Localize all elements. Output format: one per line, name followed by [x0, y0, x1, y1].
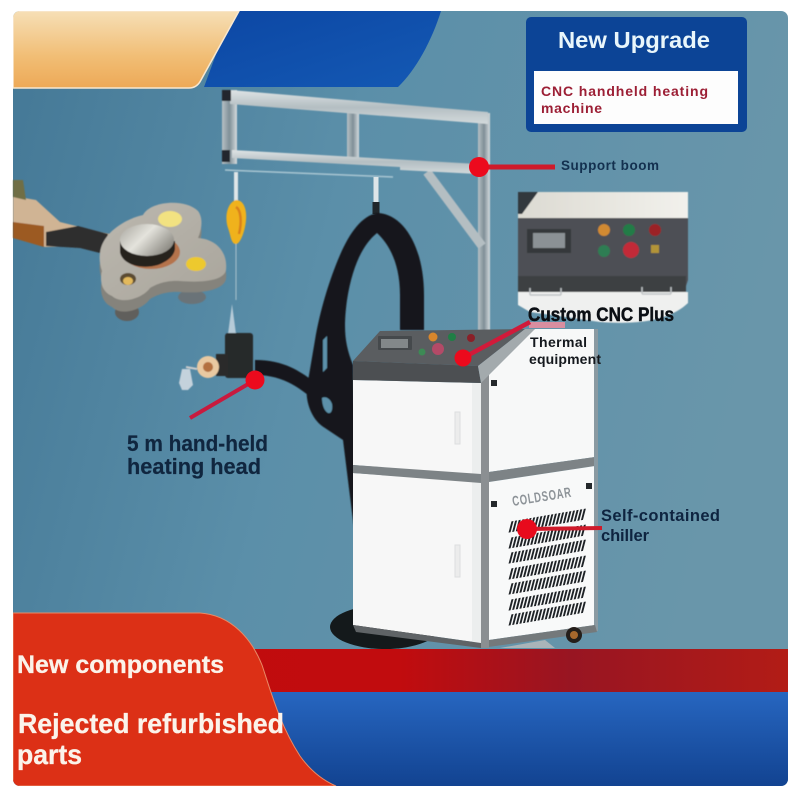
label: custom CNC plus: Custom CNC Plus	[528, 305, 674, 326]
boom thin rail	[225, 170, 393, 177]
console front	[353, 361, 481, 383]
leader: support boom	[469, 157, 555, 177]
inset handles	[530, 287, 671, 295]
panel: red corner shape	[13, 613, 336, 786]
label: thermal equipment: Thermal	[530, 334, 587, 350]
boom left upright	[222, 90, 237, 164]
icon: hanging balancer	[226, 172, 246, 300]
icon: heated three-lobed workpiece	[13, 180, 226, 321]
icon: hose hook	[374, 177, 378, 214]
banner: top blue shape	[204, 11, 441, 87]
chiller grille	[510, 514, 586, 620]
door handles	[455, 412, 460, 577]
callout subtitle: CNC handheld heating	[541, 83, 708, 99]
workpiece central cylinder	[122, 235, 180, 269]
floor reflection	[500, 640, 555, 648]
control console	[353, 329, 525, 366]
cabinet middle band right	[489, 457, 595, 482]
callout title: New Upgrade	[558, 27, 710, 53]
callout white panel	[534, 71, 738, 124]
inset top cover	[518, 192, 688, 222]
cabinet side strips	[472, 383, 481, 643]
leader: thermal equipment	[454, 322, 565, 366]
label: rejected refurbished parts: parts	[17, 739, 82, 770]
workpiece arm	[13, 196, 110, 252]
boom mid strut	[347, 108, 359, 158]
hose loop	[255, 213, 424, 545]
inset lower white edge	[518, 292, 688, 323]
console screen	[378, 336, 412, 350]
boom right upright	[478, 113, 490, 331]
banner: top orange shape	[13, 11, 239, 88]
console bevel	[478, 329, 535, 383]
inset dark panel	[518, 218, 688, 292]
cabinet middle band left	[353, 465, 481, 483]
label: support boom: Support boom	[561, 158, 659, 173]
caster wheel	[566, 627, 582, 643]
callout subtitle: machine	[541, 100, 602, 116]
base disc	[330, 605, 440, 649]
cabinet right edge	[594, 329, 598, 631]
inset screen	[527, 229, 571, 253]
cabinet base right	[481, 625, 597, 648]
label: 5 m hand-held heating head: 5 m hand-held	[127, 431, 268, 456]
cabinet right face upper	[489, 329, 595, 472]
label: 5 m hand-held heating head: heating head	[127, 454, 261, 479]
workpiece feet	[115, 303, 139, 321]
callout: new upgrade box	[526, 17, 747, 132]
inset buttons	[598, 224, 661, 258]
boom diagonal brace	[427, 172, 482, 246]
chassis side latches	[491, 380, 592, 507]
cabinet left face upper	[353, 380, 481, 475]
label: rejected refurbished parts: Rejected refurbished	[18, 708, 284, 739]
cabinet base left	[353, 625, 481, 648]
boom lower bar	[232, 150, 478, 174]
boom top bar	[230, 90, 488, 124]
band: blue strip	[13, 692, 788, 786]
label: self-contained chiller: Self-contained	[601, 507, 720, 525]
boom corner blocks	[222, 90, 231, 162]
band: red strip	[254, 649, 788, 692]
support boom frame	[222, 90, 490, 331]
label: thermal equipment: equipment	[529, 351, 601, 367]
cabinet spine	[481, 375, 489, 648]
hose gaps	[322, 336, 332, 413]
leader: chiller	[517, 519, 602, 539]
label: self-contained chiller: chiller	[601, 527, 650, 545]
icon: heating head	[179, 304, 253, 390]
cabinet left face lower	[353, 473, 481, 643]
leader: hand-held head	[190, 370, 264, 418]
machine cabinet	[353, 329, 598, 648]
brand mark: COLDSOAR	[511, 484, 573, 509]
console buttons	[418, 332, 475, 356]
workpiece body	[100, 212, 226, 312]
label: new components: New components	[17, 651, 224, 679]
workpiece yellow glows	[158, 211, 182, 227]
inset: control panel close-up	[518, 192, 688, 323]
cabinet right face lower	[489, 466, 595, 640]
